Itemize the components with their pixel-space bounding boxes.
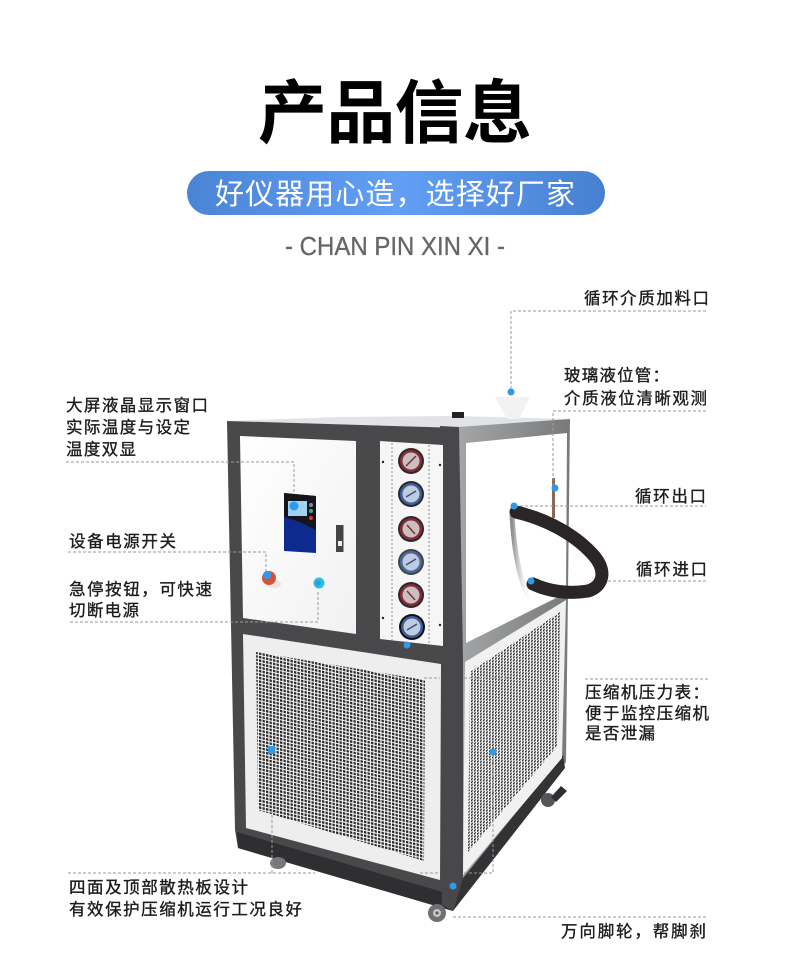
gauge 5 [398, 582, 424, 608]
machine top surface [227, 416, 570, 428]
panel: control door [240, 436, 356, 634]
panel: front vent [243, 634, 441, 880]
label: cooling panels: 有效保护压缩机运行工况良好 [69, 900, 302, 919]
subtitle pill: 好仪器用心造，选择好厂家 [215, 178, 575, 211]
power switch [314, 578, 324, 588]
label: compressor gauge: 便于监控压缩机 [585, 704, 710, 723]
side base strip [453, 755, 565, 911]
pinyin subheading: - CHAN PIN XIN XI - [285, 231, 505, 261]
dark corner post [440, 426, 463, 911]
label: sight tube: 介质液位清晰观测 [564, 389, 707, 408]
door latch [336, 525, 344, 552]
liquid level tube [552, 478, 555, 518]
label: sight tube [564, 366, 707, 408]
gauge 3 [398, 516, 424, 542]
wheel left [270, 857, 286, 869]
wheel front [428, 904, 446, 922]
label: fill port: 循环介质加料口 [584, 289, 709, 308]
gauge 1 [398, 448, 424, 474]
label: compressor gauge: 是否泄漏 [585, 724, 655, 743]
emergency stop button [262, 571, 281, 588]
label: emergency stop: 切断电源 [69, 601, 139, 620]
label: compressor gauge: 压缩机压力表： [585, 683, 709, 702]
circulation hose [516, 512, 602, 592]
label: display [66, 396, 208, 459]
hose shadow [512, 515, 531, 600]
gauge 2 [398, 481, 424, 507]
front frame [227, 421, 463, 911]
wheel right with brake [541, 786, 567, 807]
side frame [453, 419, 570, 911]
leader lines [66, 311, 708, 917]
panel: side vent [463, 600, 566, 875]
label: outlet: 循环出口 [635, 487, 706, 506]
label: cooling panels: 四面及顶部散热板设计 [69, 878, 248, 897]
label: display: 实际温度与设定 [66, 418, 190, 437]
title: 产品信息 [258, 75, 532, 152]
machine [227, 397, 602, 922]
label: inlet: 循环进口 [636, 560, 707, 579]
label: casters: 万向脚轮，帮脚刹 [561, 922, 706, 941]
label: compressor gauge [585, 683, 710, 743]
callout markers [263, 388, 558, 890]
label: cooling panels [69, 878, 302, 919]
gauge 6 [399, 614, 425, 640]
front base shadow [237, 832, 453, 911]
top knob [452, 412, 464, 418]
subtitle pill [187, 171, 605, 215]
label: power switch: 设备电源开关 [69, 532, 176, 551]
label: emergency stop: 急停按钮，可快速 [69, 580, 212, 599]
gauge 4 [398, 549, 424, 575]
funnel [495, 397, 530, 419]
label: display: 温度双显 [66, 440, 136, 459]
control display [284, 493, 316, 553]
panel: side upper [466, 433, 567, 643]
panel: gauges [380, 441, 443, 646]
label: emergency stop [69, 580, 212, 620]
label: sight tube: 玻璃液位管： [564, 366, 669, 385]
label: display: 大屏液晶显示窗口 [66, 396, 208, 415]
